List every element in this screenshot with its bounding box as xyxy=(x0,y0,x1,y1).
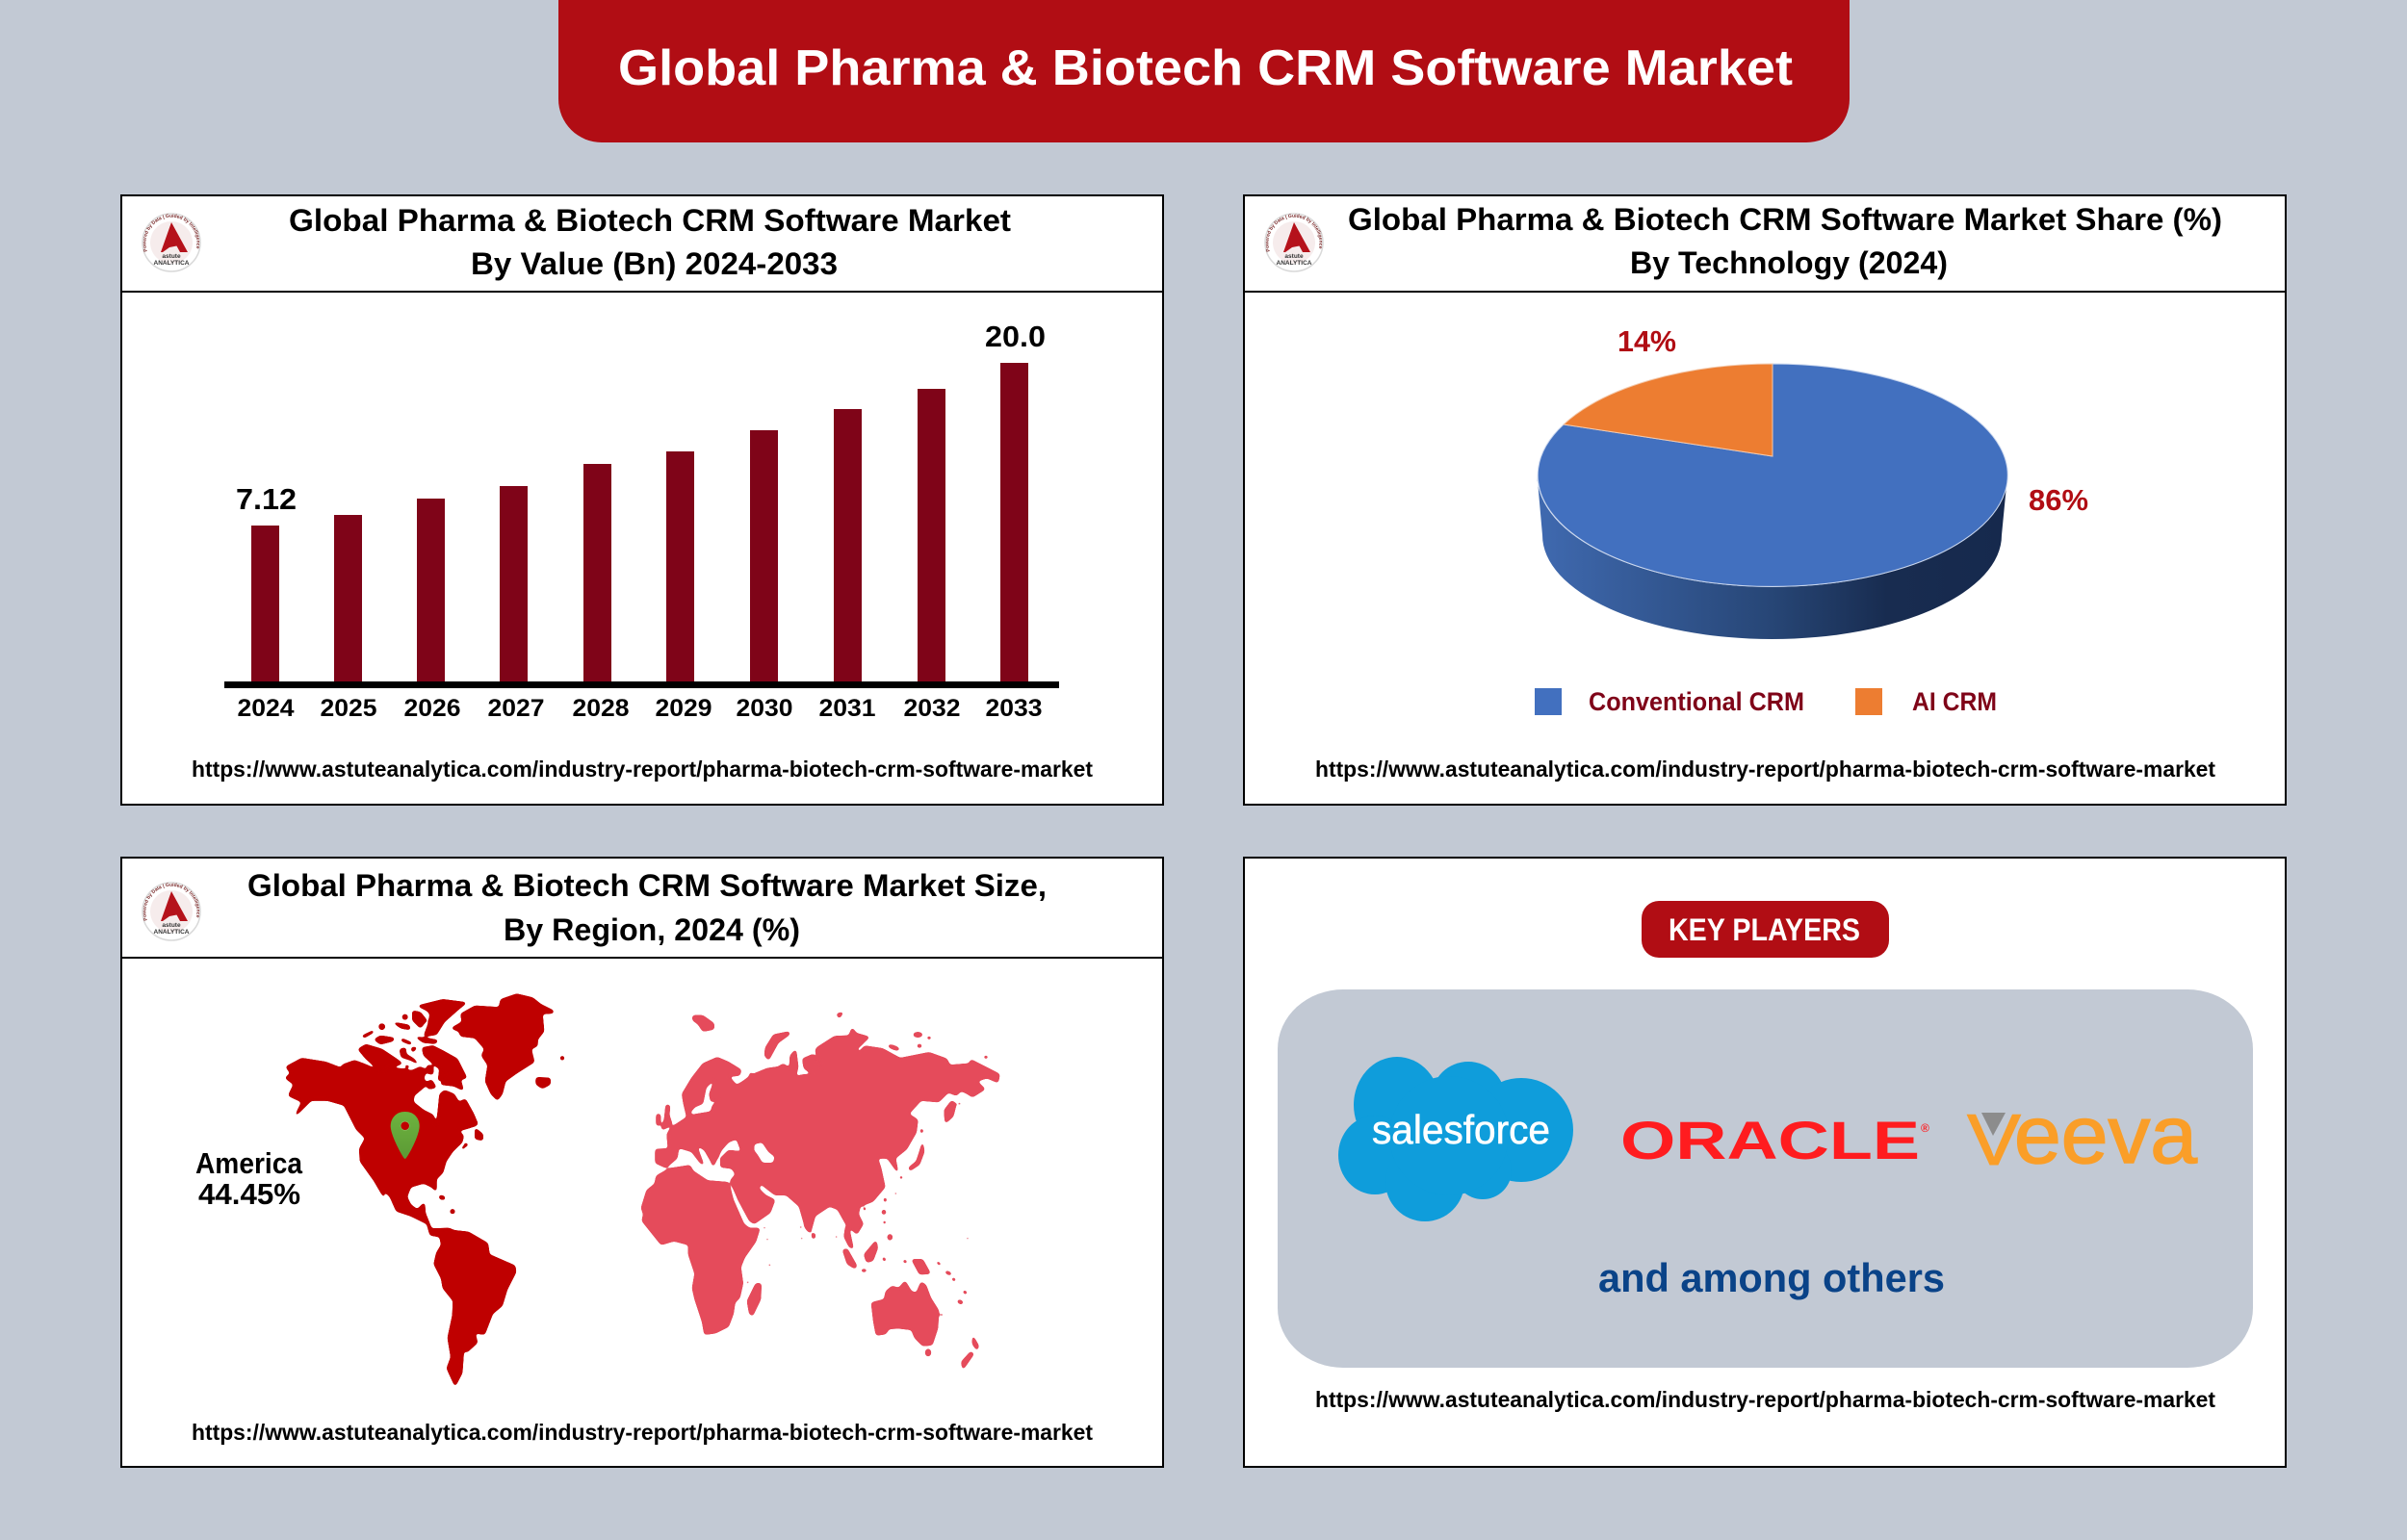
logos container xyxy=(1278,989,2253,1368)
year labels xyxy=(237,695,1042,722)
logo: oracle: ORACLE xyxy=(1620,1110,1920,1170)
logo: ANALYTICA xyxy=(1277,260,1312,267)
logo: Powered by Data | Guided by Intelligence xyxy=(142,214,200,252)
panel heading: By Region, 2024 (%) xyxy=(504,912,800,947)
region callout xyxy=(195,1146,303,1211)
title banner: Global Pharma & Biotech CRM Software Market xyxy=(618,40,1793,96)
logo: salesforce xyxy=(1338,1057,1573,1221)
others note: and among others xyxy=(1598,1255,1945,1300)
bar chart xyxy=(224,320,1059,722)
key players badge xyxy=(1642,901,1889,958)
panel: market size by region xyxy=(120,857,1164,1468)
panel frame xyxy=(121,195,1163,805)
legend: AI CRM xyxy=(1912,687,1997,716)
icon: map pin xyxy=(391,1112,420,1159)
year labels: 2029 xyxy=(655,695,712,722)
pie labels: 86% xyxy=(2029,483,2088,517)
panel heading: Global Pharma & Biotech CRM Software Market xyxy=(289,203,1011,238)
title banner xyxy=(558,0,1850,142)
map: eurasia africa oceania xyxy=(637,1012,999,1370)
logo: Powered by Data | Guided by Intelligence xyxy=(1265,214,1323,252)
legend xyxy=(1535,687,1997,716)
panel frame xyxy=(1244,195,2286,805)
logo: astute xyxy=(162,922,181,929)
source url: https://www.astuteanalytica.com/industry-report/pharma-biotech-crm-software-market xyxy=(192,757,1093,782)
year labels: 2027 xyxy=(487,695,545,722)
panel frame xyxy=(121,858,1163,1467)
logo: salesforce: salesforce xyxy=(1372,1107,1550,1152)
logo: astute xyxy=(162,253,181,260)
logo: ANALYTICA xyxy=(154,929,190,936)
value labels: 20.0 xyxy=(985,320,1046,353)
logo: veeva: V xyxy=(1967,1099,2021,1180)
year labels: 2025 xyxy=(320,695,377,722)
source url: https://www.astuteanalytica.com/industry-report/pharma-biotech-crm-software-market xyxy=(1315,1387,2215,1412)
logo: veeva: eeva xyxy=(2014,1090,2197,1180)
year labels: 2028 xyxy=(572,695,630,722)
panel frame xyxy=(1244,858,2286,1467)
logo: Powered by Data | Guided by Intelligence xyxy=(142,883,200,921)
region callout: 44.45% xyxy=(198,1177,300,1211)
panel: market by value xyxy=(120,194,1164,806)
source url: https://www.astuteanalytica.com/industry-report/pharma-biotech-crm-software-market xyxy=(1315,757,2215,782)
3d pie chart xyxy=(1537,364,2007,639)
logo xyxy=(142,882,201,941)
pie labels: 14% xyxy=(1618,324,1676,358)
pie labels xyxy=(1618,324,2088,517)
panel heading: Global Pharma & Biotech CRM Software Market Share (%) xyxy=(1348,202,2222,237)
panel heading xyxy=(247,868,1047,947)
logo xyxy=(142,213,201,272)
bars xyxy=(251,363,1028,682)
value labels xyxy=(236,320,1046,516)
panel: market share by technology xyxy=(1243,194,2287,806)
logo: oracle: ® xyxy=(1921,1121,1929,1135)
panel heading: By Value (Bn) 2024-2033 xyxy=(471,246,838,281)
panel heading xyxy=(289,203,1011,281)
year labels: 2026 xyxy=(404,695,460,722)
logo xyxy=(1264,213,1324,272)
panel heading: By Technology (2024) xyxy=(1630,245,1948,280)
year labels: 2030 xyxy=(736,695,793,722)
source url: https://www.astuteanalytica.com/industry-report/pharma-biotech-crm-software-market xyxy=(192,1420,1093,1445)
logo: astute xyxy=(1284,253,1304,260)
axis xyxy=(224,681,1059,688)
year labels: 2033 xyxy=(986,695,1042,722)
map: americas xyxy=(285,994,564,1387)
logo: ANALYTICA xyxy=(154,260,190,267)
panel: key players xyxy=(1244,858,2286,1467)
year labels: 2031 xyxy=(818,695,876,722)
panel heading xyxy=(1348,202,2222,280)
year labels: 2024 xyxy=(237,695,295,722)
region callout: America xyxy=(195,1146,303,1180)
key players badge: KEY PLAYERS xyxy=(1669,912,1860,947)
value labels: 7.12 xyxy=(236,482,297,516)
panel heading: Global Pharma & Biotech CRM Software Market Size, xyxy=(247,868,1047,903)
year labels: 2032 xyxy=(903,695,961,722)
legend: Conventional CRM xyxy=(1589,687,1804,716)
